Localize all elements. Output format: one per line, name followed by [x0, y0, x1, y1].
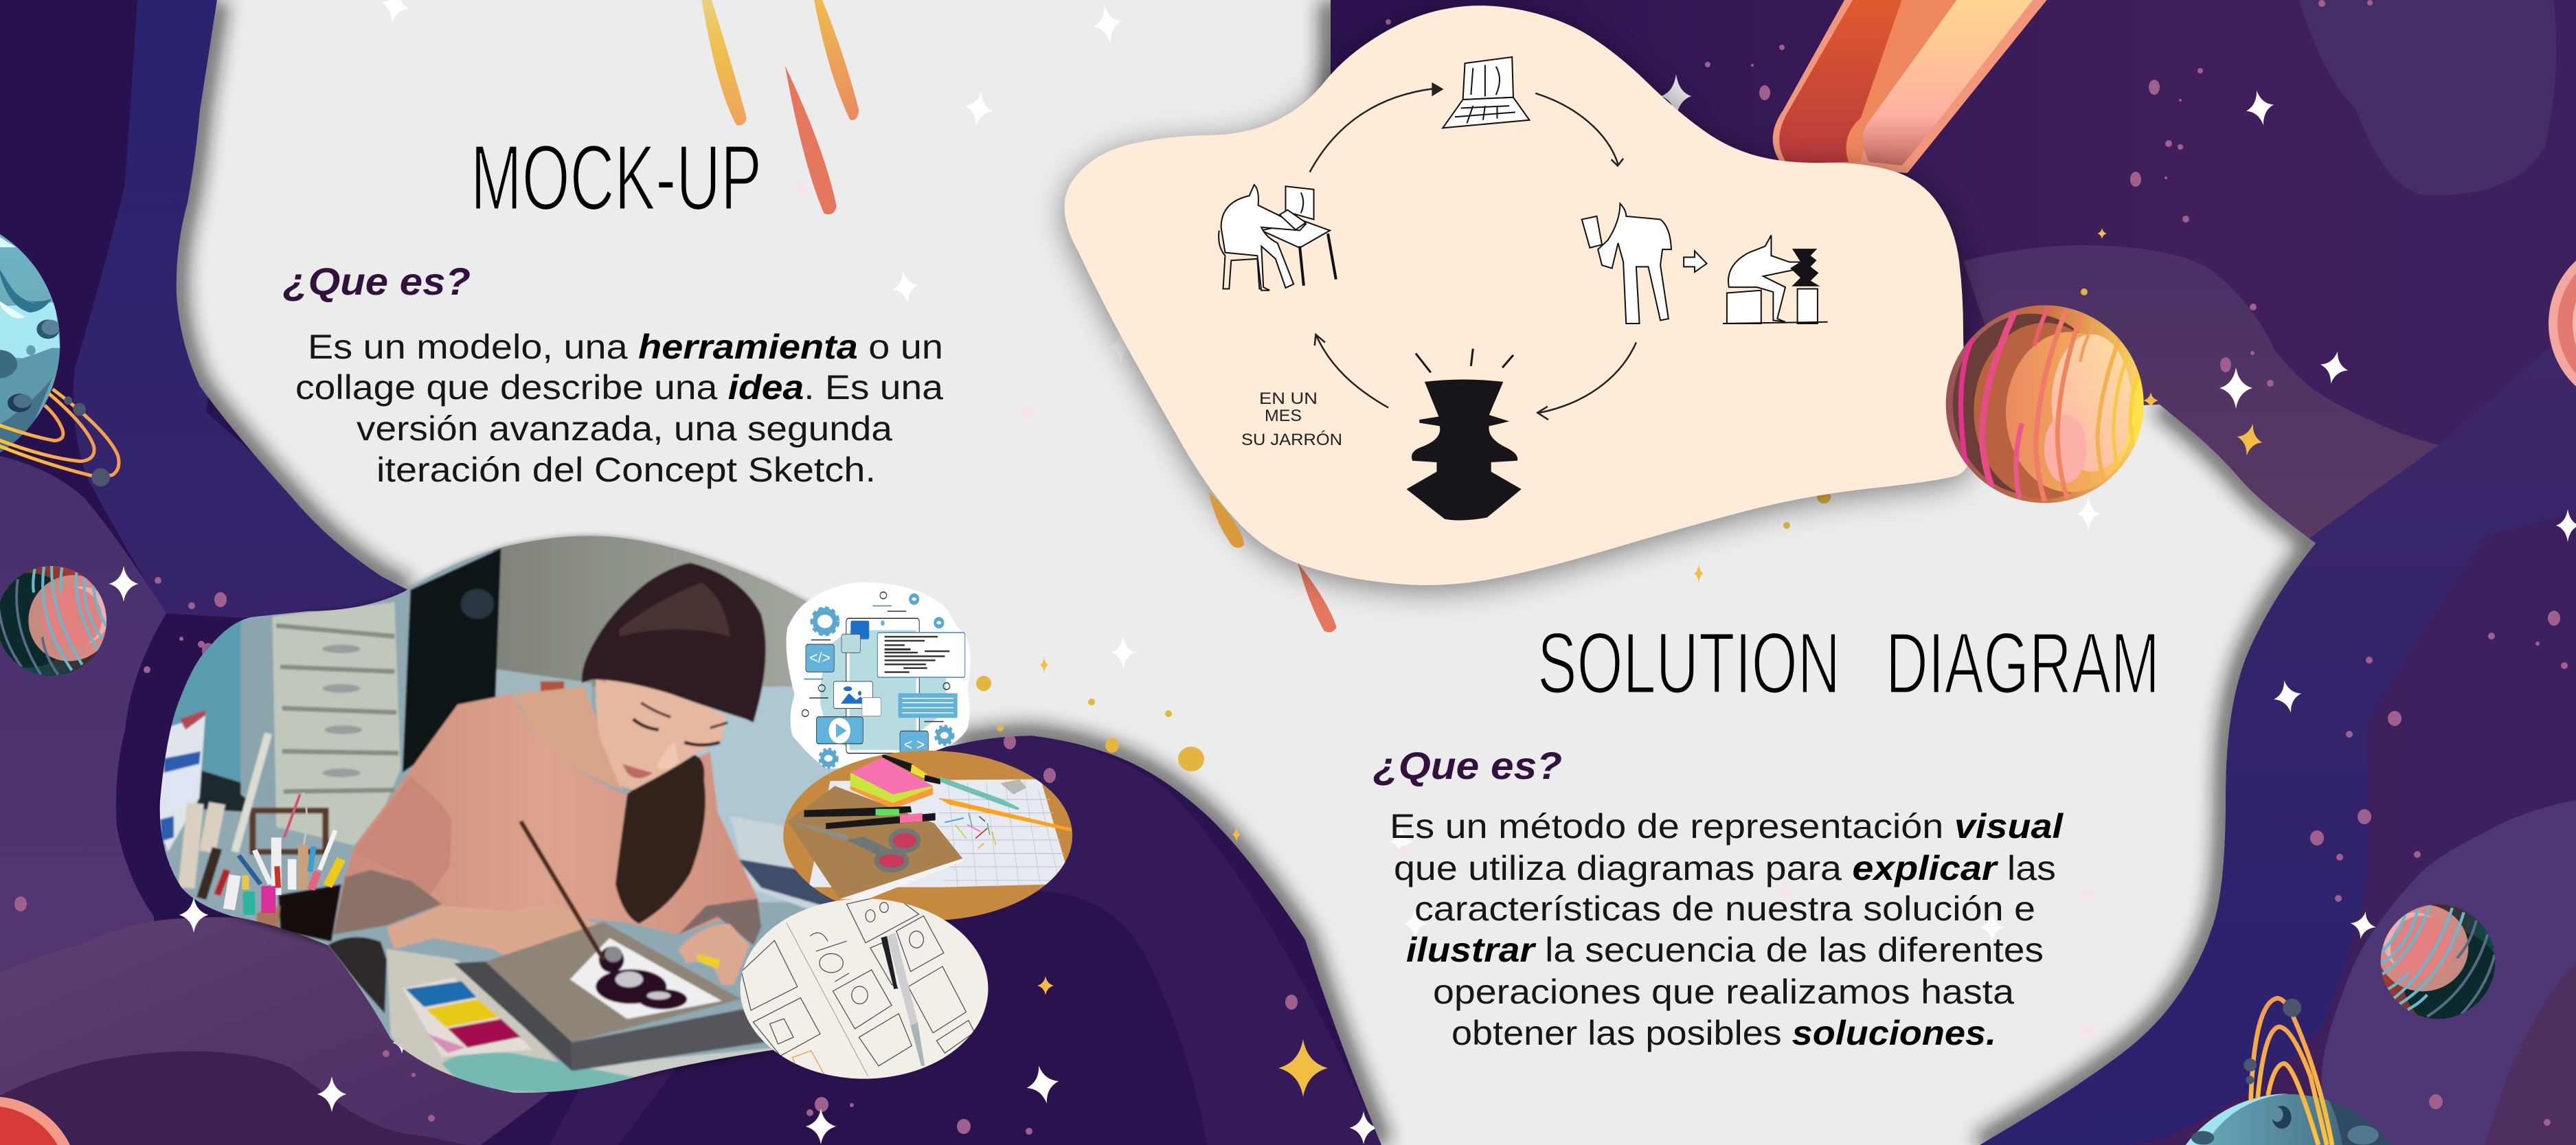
heading: Mock-up: MOCK-UP [471, 126, 762, 229]
icon: black vase with rays [1406, 349, 1522, 521]
text block: solution diagram definition: operaciones que realizamos hasta [1433, 973, 2014, 1011]
ring moons [64, 396, 110, 486]
orange rings [2251, 998, 2332, 1145]
upper right translucent swirl [2299, 0, 2556, 195]
planet: pink right edge [2549, 238, 2576, 409]
text block: mock-up definition: versión avanzada, una segunda [357, 409, 892, 448]
text block: solution diagram definition: que utiliza diagramas para explicar las [1394, 849, 2056, 887]
lower left dark blob [0, 1052, 467, 1145]
planet: pink and teal left [0, 534, 131, 703]
arrow: maker to vase [1537, 343, 1636, 420]
pens and brushes in jar [229, 793, 341, 915]
red meteor streak under blob [1298, 563, 1337, 632]
meteor streaks above the title [701, 0, 859, 214]
handwritten note [1241, 389, 1342, 449]
orange rings [0, 389, 119, 477]
heading: Solution diagram: DIAGRAM [1886, 615, 2160, 712]
text block: mock-up definition: Es un modelo, una herramienta o un [308, 328, 943, 366]
image: software diagram cut-out: < > [904, 736, 925, 753]
icon: laptop sketch [1443, 57, 1529, 128]
icon: maker sculpting vase [1723, 235, 1828, 324]
comet tail top right [1773, 0, 2047, 173]
right purple blob [1963, 245, 2439, 549]
icon: person sitting at desk [1219, 185, 1336, 291]
handwritten note: MES [1265, 407, 1302, 425]
image: notebook with wireframe sketches [741, 894, 988, 1080]
panel: cream diagram blob [1065, 5, 1971, 591]
heading: Solution diagram: SOLUTION [1537, 615, 1840, 712]
handwritten note: SU JARRÓN [1241, 431, 1342, 449]
lower middle purple hump [550, 728, 1381, 1145]
text block: mock-up definition: iteración del Concept Sketch. [376, 451, 876, 489]
phone outline [820, 631, 850, 749]
subheading: que es (solution diagram): ¿Que es? [1373, 744, 1562, 787]
image: software diagram cut-out [786, 582, 971, 769]
left purple blob [0, 456, 166, 975]
text block: solution diagram definition: ilustrar la secuencia de las diferentes [1406, 931, 2044, 969]
gold meteor streak at blob edge [1208, 491, 1244, 548]
gears [812, 596, 953, 767]
left blue band [74, 0, 426, 618]
code card [877, 633, 965, 677]
text block: mock-up definition: collage que describe una idea. Es una [295, 368, 943, 407]
text block: solution diagram definition: características de nuestra solución e [1414, 889, 2035, 928]
lower right light blob [2320, 800, 2576, 1145]
planet: orange striped [1946, 305, 2145, 503]
text block: solution diagram definition: obtener las posibles soluciones. [1451, 1014, 1996, 1052]
arrow: sitting to laptop [1310, 84, 1442, 172]
arrow: laptop to maker [1535, 93, 1623, 166]
lower left light blob [0, 917, 550, 1145]
planet: red bottom left [0, 1097, 70, 1145]
image: desk with sticky notes and scissors [780, 749, 1076, 925]
image: software diagram cut-out: </> [809, 649, 831, 667]
icon: person holding plan [1582, 203, 1707, 324]
text block: solution diagram definition: Es un método de representación visual [1390, 807, 2064, 846]
faint stars and dots on the grey panel [378, 0, 2100, 1037]
subheading: que es (mock-up): ¿Que es? [283, 260, 471, 303]
planet: blue top left with rings [0, 214, 119, 486]
planet: lower right pink and teal [2377, 905, 2502, 1029]
right blue band [1923, 324, 2576, 1145]
text block: mock-up definition [295, 328, 943, 489]
handwritten note: EN UN [1259, 389, 1318, 408]
planet: blue bottom right with rings [2186, 998, 2392, 1145]
arrow: vase to sitting [1315, 335, 1388, 408]
diagram: solution cycle sketch [1219, 57, 1828, 521]
text block: solution diagram definition [1390, 807, 2064, 1052]
photo: woman painting a block [158, 536, 868, 1096]
ring moons [2244, 999, 2301, 1084]
